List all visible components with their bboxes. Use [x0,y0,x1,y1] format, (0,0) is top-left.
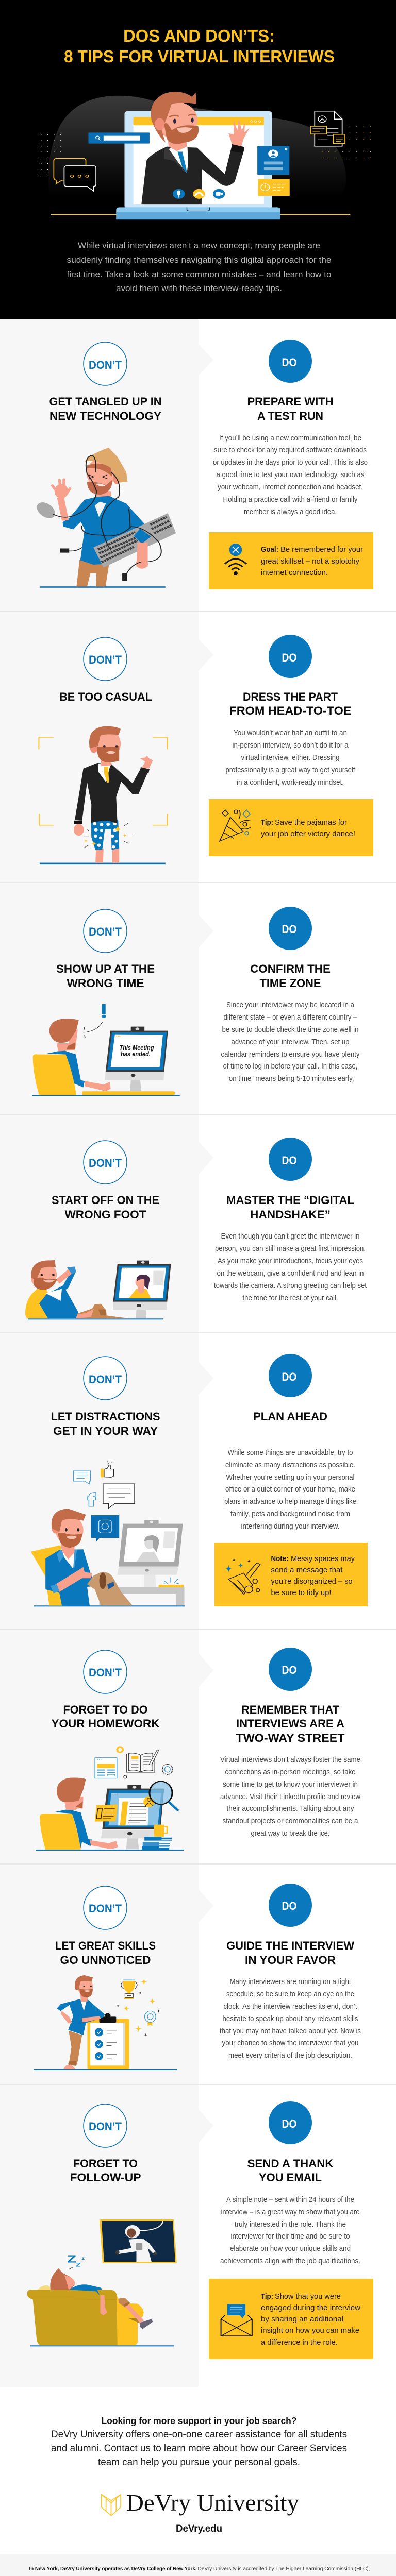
body text: Whether you’re setting up in your personal [226,1473,355,1482]
heading: do: HANDSHAKE” [250,1208,331,1221]
callout: tip: insight on how you can make [261,2327,359,2335]
body text: great way to break the ice. [251,1829,330,1838]
illustration: man tangled in cables [33,448,176,588]
heading: do [236,1703,345,1744]
body text: office or a quiet corner of your home, make [225,1485,355,1494]
heading: don't [51,1410,160,1437]
heading: don't: LET DISTRACTIONS [51,1410,160,1423]
heading: do [226,1939,354,1967]
callout: note: be sure to tidy up! [271,1589,331,1597]
body text: professionally is a great way to get yourself [226,766,355,774]
body text [220,1755,360,1838]
callout: tip: by sharing an additional [261,2315,343,2324]
intro text [67,241,331,293]
body text: elaborate on how your unique skills and [230,2244,351,2253]
body text: achievements align with the job qualifications. [220,2257,360,2265]
body text: calendar reminders to ensure you have plenty [221,1050,360,1059]
badge: do [269,1648,312,1691]
illustration: man distracted with dog and social icons [31,1462,185,1606]
body text [226,728,355,787]
heading: do: FROM HEAD-TO-TOE [229,704,352,717]
body text: some time to get to know your interviewer in [223,1780,358,1789]
heading: do [250,962,331,990]
body text: A simple note – sent within 24 hours of the [226,2195,354,2204]
body text: hesitate to speak up about any relevant skills [223,2014,358,2023]
heading: don't [56,962,155,990]
body text: meet every criteria of the job description. [228,2051,352,2060]
illustration: man waving from laptop [41,92,371,219]
title [64,26,335,66]
illustration: man at monitor, meeting ended: has ended. [121,1050,151,1058]
badge: don't: DON’T [89,359,122,371]
body text: As you make your introductions, focus your eyes [218,1257,363,1265]
body text: or updates in the days prior to your call. This is also [213,458,368,467]
intro text: avoid them with these interview-ready tips. [116,283,282,293]
body text: sure to check for any required software downloads [214,446,367,454]
badge: don't [84,1886,127,1929]
badge: do [269,1138,312,1181]
call to action text: Looking for more support in your job search? [101,2415,297,2426]
heading: do: PLAN AHEAD [253,1410,327,1423]
panel: tip 6 homework [36,1648,360,1851]
heading: don't [50,395,162,422]
heading: don't: START OFF ON THE [52,1194,159,1207]
callout: goal: internet connection. [261,569,328,577]
heading: do: TIME ZONE [260,977,321,990]
badge: do [269,2101,312,2144]
heading: do [248,2157,334,2184]
body text: be sure to double check the time zone well in [222,1025,359,1034]
heading: do: REMEMBER THAT [241,1703,340,1716]
icon: envelope with speech bubble [221,2304,252,2336]
badge: don't [84,1650,127,1693]
heading: don't: BE TOO CASUAL [59,690,152,703]
body text: of time to log in before your call. In this case, [223,1062,358,1071]
panel: tip 5 distractions [31,1354,368,1606]
callout: note: Note: [271,1555,289,1563]
badge: do [269,1884,312,1927]
badge: do [269,1354,312,1397]
badge: don't [84,1141,127,1184]
badge: don't [84,342,127,385]
body text [224,1448,356,1531]
illustration: man researching at monitor [36,1747,184,1851]
badge: do: DO [282,1900,297,1912]
callout: tip [209,2279,373,2359]
badge: don't: DON’T [89,2120,122,2133]
heading: don't [55,1939,156,1967]
badge: don't: DON’T [89,925,122,938]
body text [220,1977,361,2060]
heading: don't: LET GREAT SKILLS [55,1939,156,1952]
body text: truly interested in the role. Thank the [235,2220,346,2229]
heading: don't: YOUR HOMEWORK [52,1717,160,1730]
badge: do: DO [282,1664,297,1676]
body text: towards the camera. A strong greeting can help set [214,1281,367,1290]
body text: While some things are unavoidable, try to [228,1448,353,1457]
panel: footer disclaimer [0,2554,396,2576]
panel: footer disclaimer: DeVry University is accredited by The Higher Learning Commission (HLC), [198,2566,370,2572]
callout: tip: Tip: [261,2293,273,2301]
callout: goal: great skillset – not a splotchy [261,557,360,566]
heading: do: PREPARE WITH [248,395,333,408]
heading: do: INTERVIEWS ARE A [236,1717,344,1730]
heading: don't: GET IN YOUR WAY [53,1425,158,1437]
body text: in-person interview, so don’t do it for a [232,741,349,750]
heading: do: SEND A THANK [248,2157,334,2170]
illustration: man asleep on sofa under astronaut tv: Z [67,2253,76,2265]
heading: do: IN YOUR FAVOR [245,1954,336,1967]
callout: tip: a difference in the role. [261,2338,338,2347]
badge: do [269,907,312,950]
badge: don't: DON’T [89,1666,122,1679]
heading: do [229,690,352,717]
badge: do [269,340,312,383]
heading: don't: GO UNNOTICED [60,1954,151,1967]
heading: don't: FORGET TO [73,2157,138,2170]
heading: don't [52,1194,159,1221]
icon: broom [225,1558,260,1594]
body text: “on time” means being 5-10 minutes early. [227,1074,354,1083]
heading: do: A TEST RUN [257,410,323,422]
heading: do [248,395,333,422]
intro text: first time. Take a look at some common mistakes – and learn how to [67,269,331,279]
heading: do: MASTER THE “DIGITAL [226,1194,354,1207]
callout: tip: engaged during the interview [261,2304,361,2312]
badge: do [269,635,312,678]
call to action text: DeVry University offers one-on-one career assistance for all students [51,2429,347,2440]
body text: family, pets and background noise from [230,1510,350,1518]
badge: don't: DON’T [89,653,122,666]
heading: don't: NEW TECHNOLOGY [50,410,161,422]
callout: tip: Tip: [261,819,273,827]
body text: clock. As the interview reaches its end, don’t [224,2002,357,2011]
heading: don't [52,1703,160,1730]
body text: Virtual interviews don’t always foster the same [220,1755,360,1764]
heading: don't [70,2157,141,2184]
heading: do: CONFIRM THE [250,962,331,975]
body text: the tone for the rest of your call. [242,1294,338,1302]
badge: do: DO [282,1370,297,1383]
illustration: man at monitor, meeting ended [32,1004,180,1096]
call to action text [51,2415,347,2468]
heading: do: GUIDE THE INTERVIEW [226,1939,354,1952]
badge: do: DO [282,923,297,936]
body text: You wouldn’t wear half an outfit to an [234,728,347,737]
badge: do: DO [282,1154,297,1167]
heading: don't: FORGET TO DO [63,1703,147,1716]
badge: don't: DON’T [89,1373,122,1386]
panel: tip 1 technology [33,340,373,589]
heading: don't: GET TANGLED UP IN [50,395,162,408]
website: DeVry.edu [176,2523,222,2534]
badge: don't [84,637,127,681]
icon: shield [102,2495,121,2516]
body text: different state – or even a different country – [224,1013,357,1022]
title: DOS AND DON’TS: [123,26,275,45]
badge: do: DO [282,651,297,664]
body text: Since your interviewer may be located in a [226,1001,355,1009]
heading: do [226,1194,354,1221]
body text: Holding a practice call with a friend or family [223,495,358,504]
heading: don't: WRONG TIME [67,977,144,990]
body text: Many interviewers are running on a tight [230,1977,351,1986]
illustration: man in suit and shorts [39,726,168,864]
heading: don't: FOLLOW-UP [70,2171,141,2184]
callout: note: you’re disorganized – so [271,1578,353,1586]
panel: tip 2 casual [39,635,373,864]
panel: tip 4 handshake [25,1138,367,1319]
body text: person, you can still make a great first impression. [215,1244,366,1253]
panel: tip 8 follow up [27,2101,373,2359]
heading: do: DRESS THE PART [243,690,338,703]
callout: tip: Show that you were [275,2293,341,2301]
heading: don't: WRONG FOOT [65,1208,146,1221]
illustration: man asleep on sofa under astronaut tv [27,2219,177,2346]
call to action text: team can help you pursue your personal goals. [98,2457,300,2468]
panel: header [0,0,396,319]
callout: tip: your job offer victory dance! [261,830,355,838]
body text: schedule, so be sure to keep an eye on the [226,1990,354,1998]
callout: goal: Goal: [261,546,278,554]
panel: footer disclaimer: In New York, DeVry University operates as DeVry College of New York. [29,2566,197,2572]
callout: note [214,1543,368,1606]
badge: don't [84,2104,127,2147]
logo: DeVry University: DeVry University [126,2489,299,2516]
heading: do: TWO-WAY STREET [236,1732,345,1744]
callout: note: send a message that [271,1566,342,1574]
badge: do: DO [282,356,297,369]
body text: your webcam, internet connection and headset. [218,483,363,492]
illustration: man leaning on checklist with trophy [34,1975,177,2070]
body text: in a confident, work-ready mindset. [237,778,344,787]
body text: on the webcam, give a confident nod and lean in [217,1269,364,1278]
title: 8 TIPS FOR VIRTUAL INTERVIEWS [64,47,335,66]
body text: standout projects or commonalities can be a [223,1817,358,1825]
illustration: man reclining at monitor [25,1258,171,1319]
body text: If you’ll be using a new communication tool, be [219,434,361,443]
icon: wifi with x [225,544,246,575]
body text [221,1001,360,1083]
body text: member is always a good idea. [244,507,337,516]
body text: interfering during your interview. [241,1522,339,1531]
callout: goal: Be remembered for your [280,546,363,554]
body text: their accomplishments. Talking about any [227,1804,354,1813]
illustration: man at monitor, meeting ended: This Meeting [120,1044,154,1052]
icon: party popper [220,810,251,841]
body text: interviewer for their time and be sure to [231,2232,350,2241]
panel: tip 3 time [32,907,360,1096]
badge: don't: DON’T [89,1157,122,1170]
body text [213,434,368,516]
heading: don't: SHOW UP AT THE [56,962,155,975]
illustration: man asleep on sofa under astronaut tv: Z [76,2262,81,2268]
body text: a good time to test your own technology, such as [217,470,364,479]
callout: tip [209,799,373,856]
body text: advance of your interview. Then, set up [231,1038,350,1046]
intro text: While virtual interviews aren’t a new concept, many people are [78,241,320,250]
body text: advance. Visit their LinkedIn profile and review [220,1792,360,1801]
body text: your chance to show the interviewer that you [222,2039,359,2047]
body text: interview – is a great way to show that you are [221,2208,360,2216]
body text [214,1232,367,1302]
callout: tip: Save the pajamas for [275,819,347,827]
panel: tip 7 skills [34,1884,361,2070]
body text: plans in advance to help manage things like [224,1497,356,1506]
illustration: man asleep on sofa under astronaut tv: z [81,2257,85,2261]
badge: don't: DON’T [89,1902,122,1915]
callout: goal [209,532,373,589]
callout: note: Messy spaces may [291,1555,355,1563]
body text: virtual interview, either. Dressing [241,753,339,762]
badge: don't [84,1357,127,1400]
call to action text: and alumni. Contact us to learn more about how our Career Services [51,2443,347,2454]
intro text: suddenly finding themselves navigating this digital approach for the [67,255,331,265]
body text [220,2195,360,2265]
body text: eliminate as many distractions as possible. [225,1461,355,1469]
badge: do: DO [282,2117,297,2130]
body text: that you may not have talked about yet. Now is [220,2027,361,2036]
badge: don't [84,909,127,953]
body text: connections as in-person meetings, so take [225,1768,356,1776]
body text: Even though you can’t greet the interviewer in [221,1232,360,1241]
heading: do: YOU EMAIL [259,2171,322,2184]
